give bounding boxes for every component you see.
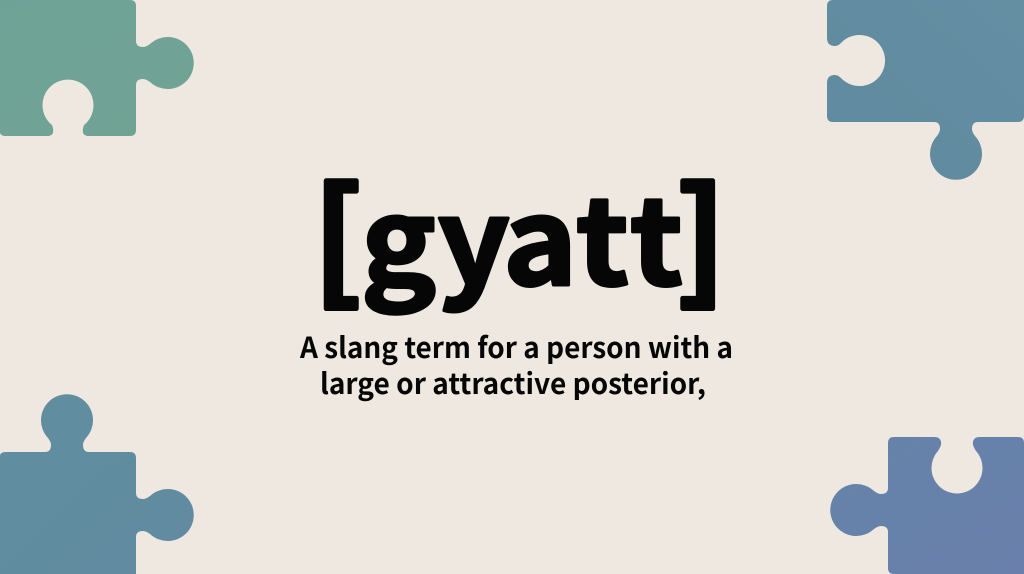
icon: puzzle piece bottom left: [0, 394, 194, 574]
icon: puzzle piece top right: [827, 0, 1024, 180]
title: left bracket: [: [313, 134, 363, 324]
definition line 2: large or attractive posterior,: [320, 361, 706, 403]
icon: puzzle piece bottom right: [830, 437, 1024, 574]
icon: puzzle piece top left: [0, 0, 194, 136]
definition line 1: A slang term for a person with a: [299, 325, 733, 367]
title: word: gyatt: [361, 147, 683, 320]
title: right bracket: ]: [676, 134, 726, 324]
definition text: [299, 325, 733, 403]
title: [313, 134, 726, 324]
